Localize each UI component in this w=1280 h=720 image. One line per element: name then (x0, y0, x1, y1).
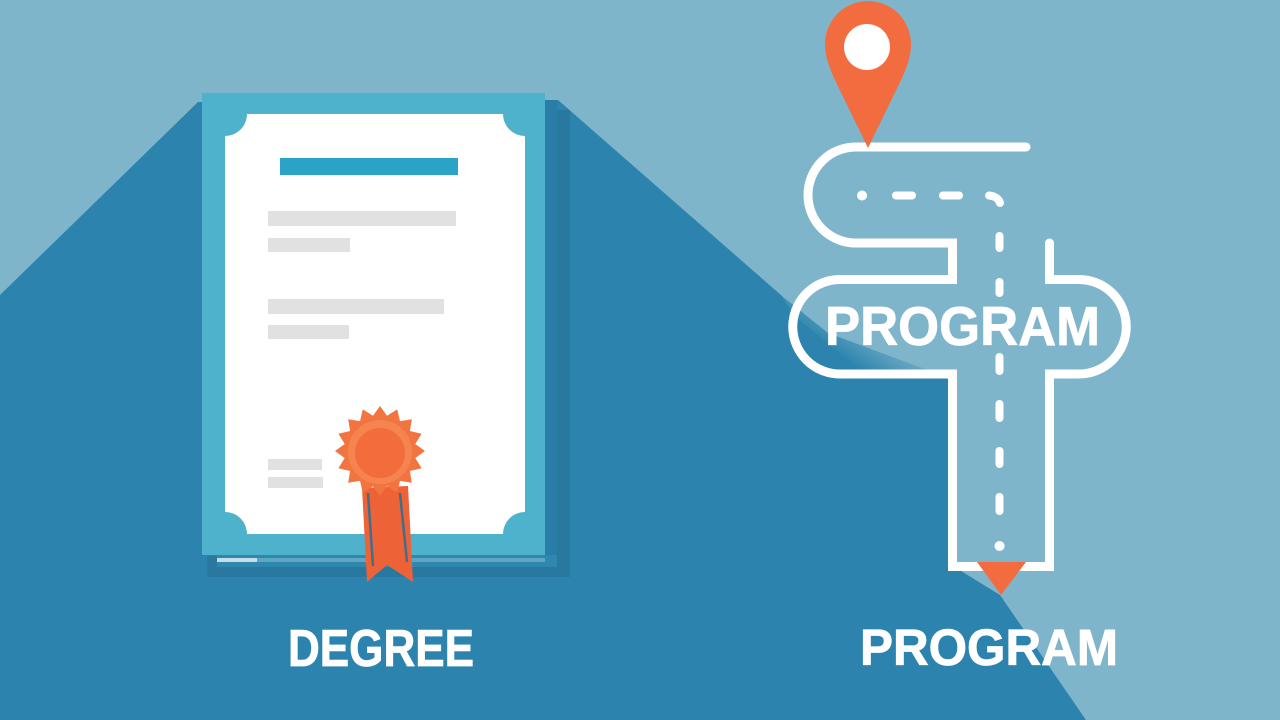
long shadow (0, 100, 1086, 720)
icon: ribbon tails (362, 486, 413, 582)
road centre dashes (862, 196, 1000, 546)
icon: location pin (825, 1, 911, 148)
icon: road end arrow (977, 562, 1026, 595)
icon: rosette seal (335, 406, 425, 496)
certificate cover (202, 93, 545, 555)
road label: PROGRAM (825, 295, 1100, 357)
panel: program roadmap (793, 1, 1126, 595)
shadow transition band inside the pill (782, 296, 928, 372)
panel: degree certificate (202, 93, 570, 582)
text placeholder lines (268, 211, 456, 488)
road outline (793, 147, 1126, 566)
certificate stacked sheets and shadow (207, 100, 570, 577)
heading: degree: DEGREE (288, 620, 474, 678)
certificate page (225, 114, 525, 534)
heading: program: PROGRAM (860, 619, 1118, 676)
certificate title bar (280, 158, 458, 175)
